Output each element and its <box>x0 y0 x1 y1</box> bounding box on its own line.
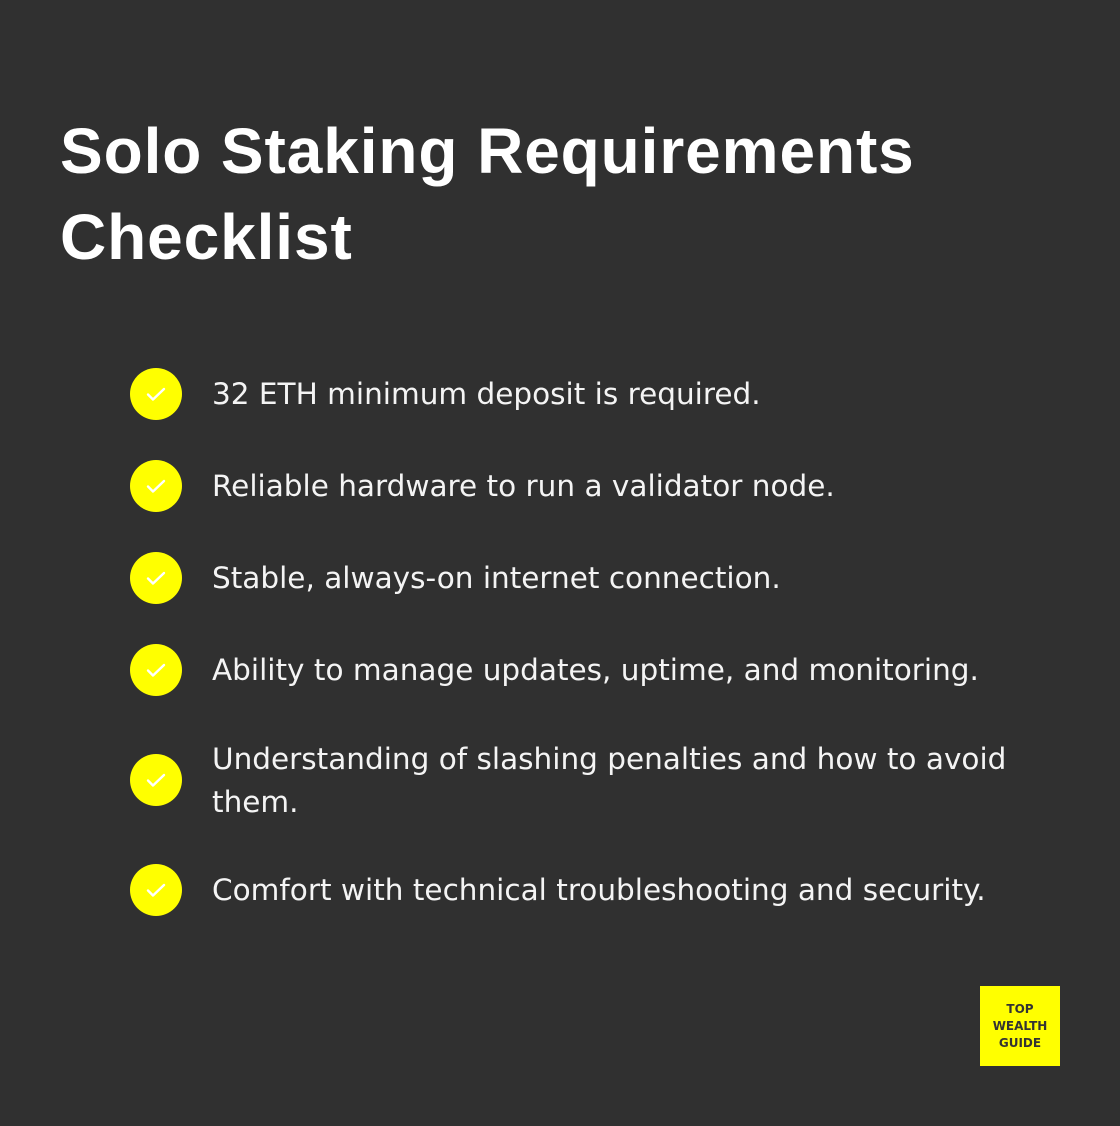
text: Understanding of slashing penalties and how to avoid <box>212 742 1006 776</box>
checklist item 1 <box>130 368 761 420</box>
text <box>212 742 1006 819</box>
logo: TOP <box>1006 1002 1034 1016</box>
text: them. <box>212 785 299 819</box>
icon: check <box>130 754 182 806</box>
text: Stable, always-on internet connection. <box>212 561 781 595</box>
text: Ability to manage updates, uptime, and monitoring. <box>212 653 979 687</box>
title: Checklist <box>60 201 353 273</box>
checklist item 4 <box>130 644 979 696</box>
icon: check <box>130 864 182 916</box>
checklist item 3 <box>130 552 781 604</box>
icon: check <box>130 368 182 420</box>
title <box>60 115 915 273</box>
text: Comfort with technical troubleshooting and security. <box>212 873 986 907</box>
checklist item 2 <box>130 460 835 512</box>
logo: GUIDE <box>999 1036 1041 1050</box>
icon: check <box>130 460 182 512</box>
text: 32 ETH minimum deposit is required. <box>212 377 761 411</box>
icon: check <box>130 552 182 604</box>
logo <box>980 986 1060 1066</box>
text: Reliable hardware to run a validator node. <box>212 469 835 503</box>
logo: WEALTH <box>993 1018 1047 1032</box>
checklist item 6 <box>130 864 986 916</box>
icon: check <box>130 644 182 696</box>
checklist item 5 <box>130 742 1006 819</box>
title: Solo Staking Requirements <box>60 115 915 187</box>
